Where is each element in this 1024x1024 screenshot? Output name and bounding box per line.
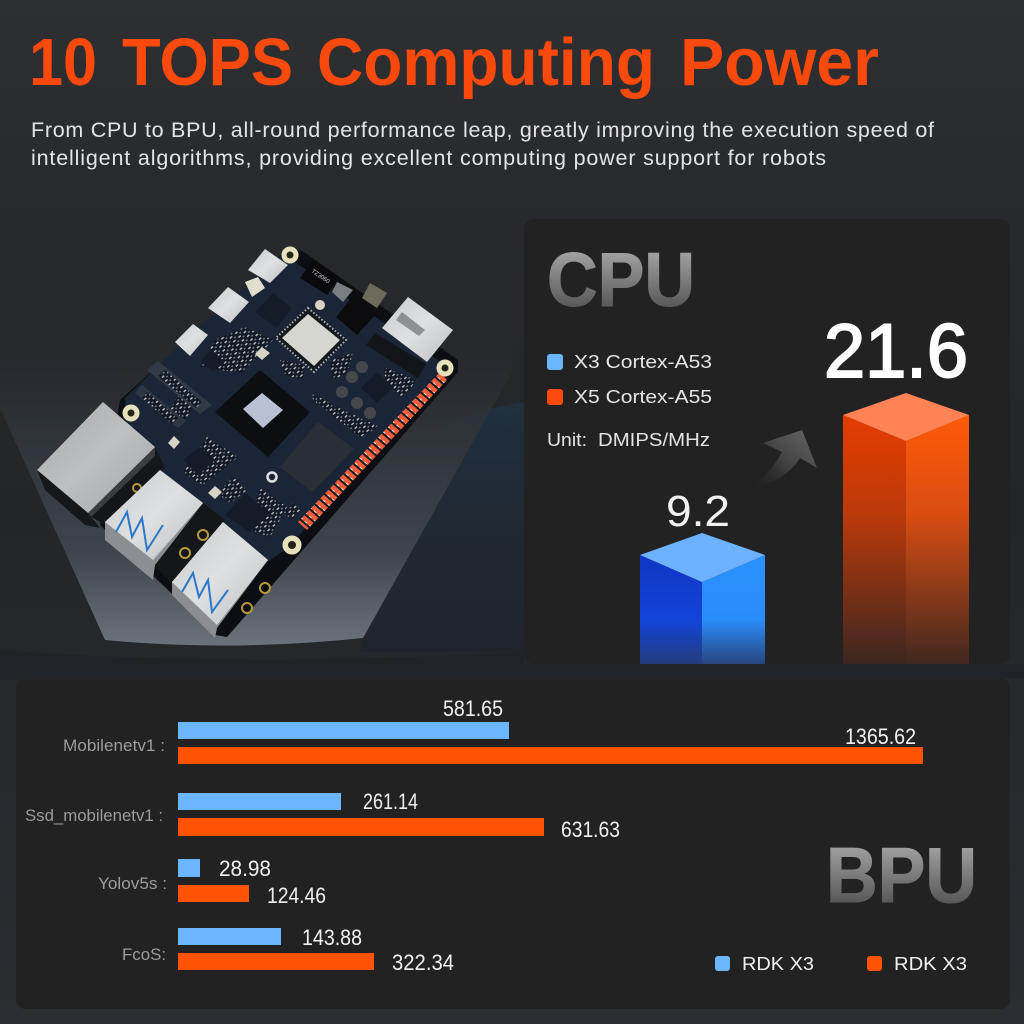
cpu heading: CPU [547, 238, 695, 323]
row: Yolov5s: Yolov5s : [98, 874, 167, 893]
value 21.6: 21.6 [824, 309, 968, 394]
logo ring [268, 472, 276, 482]
glossy shields between ports [85, 447, 225, 585]
gpio header [298, 372, 447, 530]
circuit board product photo [37, 247, 458, 638]
mounting holes [123, 247, 453, 554]
usb port one [105, 470, 203, 580]
intro text [31, 118, 934, 170]
row: FcoS: FcoS: [122, 945, 166, 964]
cpu legend: DMIPS/MHz [598, 430, 710, 450]
background light beam and hills [0, 340, 1024, 680]
row: Mobilenetv1 [63, 696, 923, 764]
row: Mobilenetv1: Mobilenetv1 : [63, 736, 165, 755]
row: Mobilenetv1: 1365.62 [845, 724, 916, 749]
panel: CPU [524, 219, 1010, 664]
smt component fields [170, 327, 417, 537]
camera connectors [135, 361, 212, 428]
row: Ssd_mobilenetv1 [25, 789, 620, 842]
audio jack [362, 283, 387, 308]
white passive parts [168, 300, 325, 499]
title: Computing [317, 25, 655, 100]
bpu heading: BPU [826, 831, 977, 919]
row: Mobilenetv1: 581.65 [443, 696, 503, 721]
pcb base [100, 247, 458, 637]
usb port two [172, 522, 268, 638]
bpu legend: RDK X3 [894, 954, 967, 974]
mounting hole centres [128, 252, 448, 549]
sensor and button [300, 260, 353, 302]
gold contact rings [133, 484, 270, 613]
value 9.2: 9.2 [666, 487, 730, 536]
wifi module [276, 308, 346, 372]
cpu legend: X3 Cortex-A53 [574, 352, 712, 372]
cpu legend: Unit: [547, 430, 587, 450]
title: TOPS [122, 25, 293, 100]
cpu legend [547, 352, 712, 450]
title: 10 [29, 25, 97, 100]
cpu panel background [524, 219, 1010, 664]
cpu legend: X5 Cortex-A55 [574, 387, 712, 407]
ethernet port [37, 402, 155, 528]
bpu panel background [16, 678, 1010, 1009]
bpu legend [715, 954, 967, 974]
row: Ssd_mobilenetv1: 631.63 [561, 817, 620, 842]
row: FcoS: 143.88 [302, 925, 362, 950]
title [29, 25, 879, 100]
row: Yolov5s: 124.46 [267, 883, 326, 908]
row: Ssd_mobilenetv1: Ssd_mobilenetv1 : [25, 806, 163, 825]
small chips [183, 293, 394, 533]
inductors [336, 361, 376, 419]
usb-c ports [175, 249, 288, 356]
bpu legend: RDK X3 [742, 954, 814, 974]
hdmi port [366, 297, 453, 378]
sensor and button: TZ3060 [310, 269, 331, 286]
row: FcoS: 322.34 [392, 950, 454, 975]
row: Yolov5s [98, 856, 326, 908]
panel: BPU [16, 678, 1010, 1009]
memory chip [280, 422, 354, 492]
title: Power [680, 25, 879, 100]
intro text: From CPU to BPU, all-round performance leap, greatly improving the execution speed of [31, 118, 934, 142]
row: Yolov5s: 28.98 [219, 856, 271, 881]
intro text: intelligent algorithms, providing excellent computing power support for robots [31, 146, 826, 170]
orange bar [843, 393, 969, 664]
blue bar [640, 533, 765, 664]
row: FcoS [122, 925, 454, 975]
arrow [750, 430, 817, 488]
main soc chip [215, 370, 310, 457]
row: Ssd_mobilenetv1: 261.14 [363, 789, 418, 814]
